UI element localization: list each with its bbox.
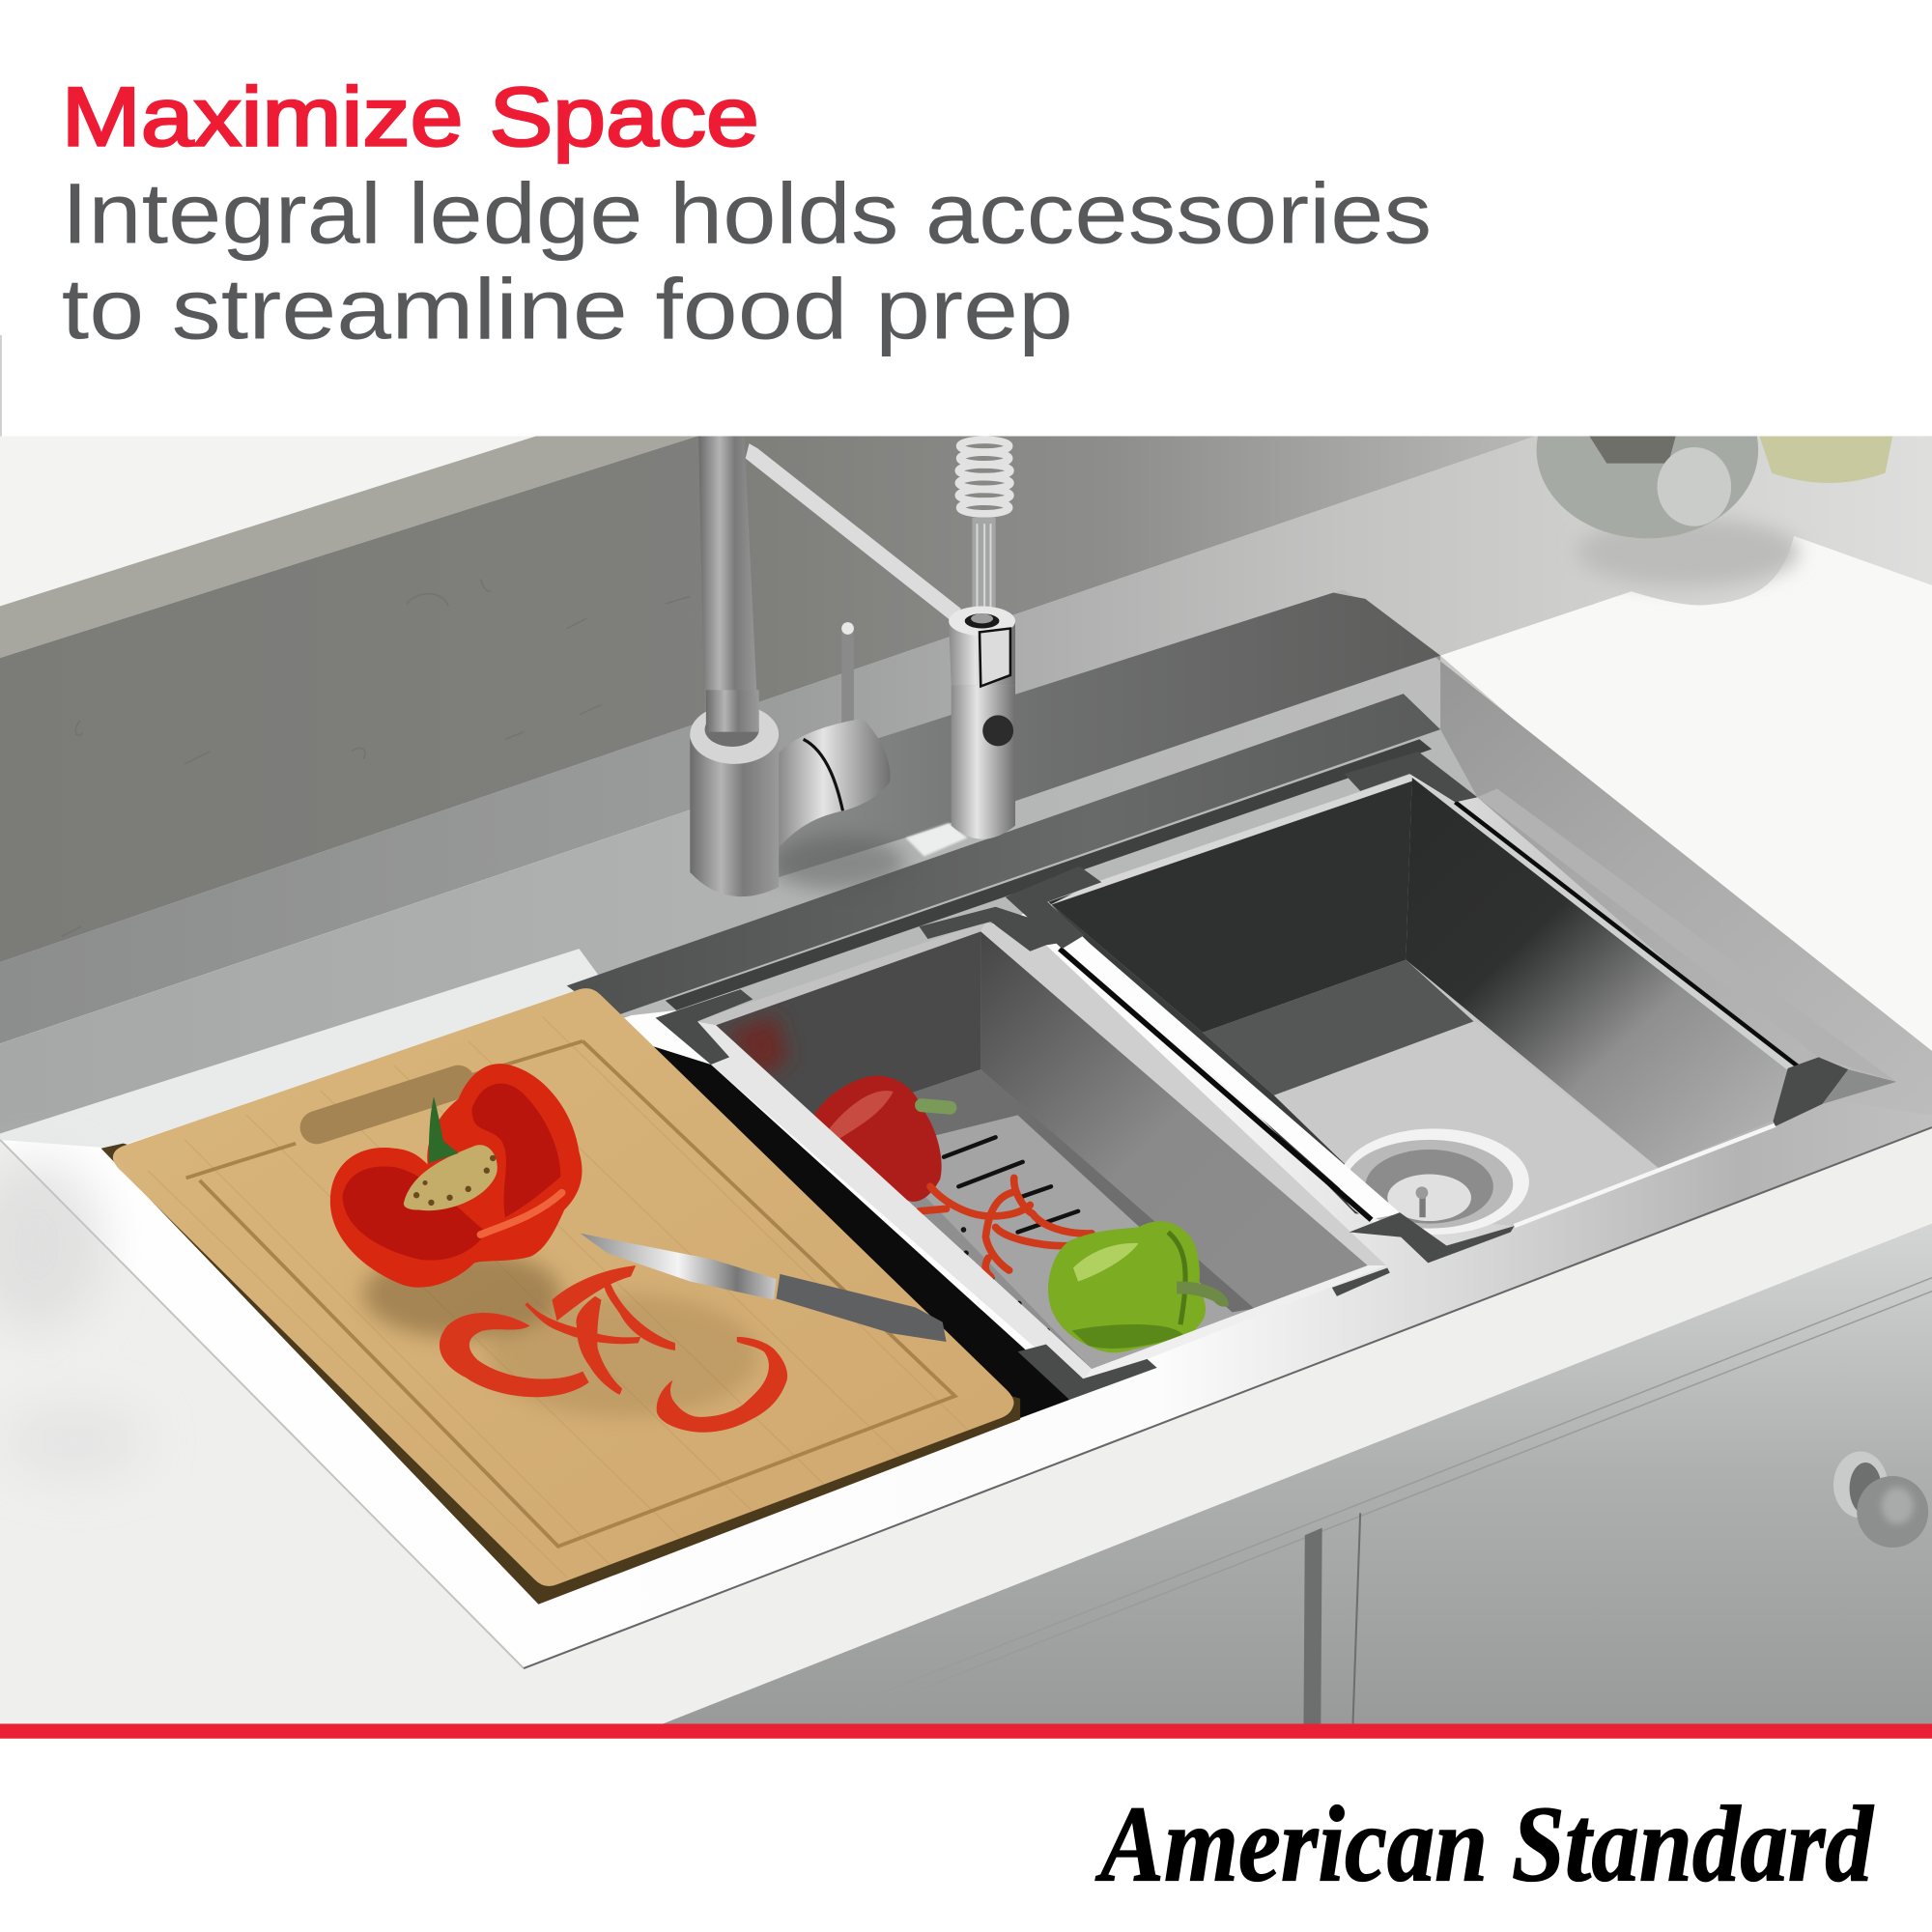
front counter edge bbox=[524, 1130, 1932, 1723]
left bowl bbox=[716, 931, 1368, 1369]
wood grain bbox=[148, 1016, 974, 1608]
right bowl base bbox=[1052, 904, 1543, 1159]
pepper flesh bright rim bbox=[480, 1193, 562, 1235]
spray head bbox=[949, 610, 1015, 685]
right bowl side wall bbox=[1406, 778, 1825, 1168]
juice groove bbox=[186, 1041, 955, 1547]
right bowl back wall bbox=[1048, 778, 1412, 1033]
photo: kitchen sink scene bbox=[0, 361, 1932, 1725]
spout arm bbox=[746, 443, 961, 621]
colander tray bbox=[912, 1069, 1254, 1369]
handle bbox=[777, 1274, 947, 1342]
pepper stem bbox=[429, 1096, 458, 1163]
cabinet door seam bbox=[1303, 1528, 1322, 1723]
pepper slices on board bbox=[440, 1265, 787, 1433]
left bowl base bbox=[716, 931, 1368, 1369]
white reflection strip bbox=[0, 949, 607, 1149]
cabinets bbox=[663, 1224, 1932, 1723]
right rim bbox=[1435, 654, 1932, 1051]
black gap under board bbox=[640, 1042, 1069, 1419]
pepper shadow bbox=[363, 1249, 560, 1338]
slice shadows bbox=[487, 1293, 757, 1417]
faucet shadow bbox=[770, 836, 906, 890]
ledge channel bbox=[567, 694, 1477, 1021]
plate edges bbox=[0, 1127, 1932, 1668]
braided hose bbox=[972, 518, 996, 618]
subheading line 2: to streamline food prep bbox=[62, 261, 1073, 357]
sink top plate bbox=[0, 589, 1932, 1668]
spring bbox=[958, 440, 1010, 514]
back shelf bbox=[0, 437, 697, 658]
bright counter reflection bbox=[1440, 536, 1932, 1084]
divider bar bbox=[1060, 938, 1401, 1220]
rear counter bbox=[0, 437, 1932, 1060]
yellow bottle bbox=[1759, 437, 1892, 483]
dark wall reflection bbox=[779, 593, 1440, 877]
faucet lever bbox=[841, 629, 854, 746]
knife bbox=[581, 1234, 947, 1342]
subheading line 1: Integral ledge holds accessories bbox=[62, 164, 1432, 261]
faucet base bbox=[690, 739, 779, 896]
drain bbox=[1339, 1128, 1529, 1235]
right bowl left wall shadow bbox=[1049, 902, 1359, 1213]
soft reflection patches bbox=[906, 823, 967, 856]
left bowl frame bbox=[695, 922, 1386, 1381]
big red pepper half bbox=[330, 1064, 582, 1288]
cabinet knob bbox=[1833, 1452, 1928, 1548]
left bowl side wall bbox=[980, 931, 1368, 1309]
glass bowl shadow bbox=[1577, 518, 1799, 586]
title block bbox=[62, 71, 1432, 357]
faucet bbox=[690, 437, 1015, 896]
handle cutout bbox=[317, 1082, 458, 1127]
green pepper bbox=[1048, 1221, 1229, 1352]
rear plate strip bbox=[0, 589, 1440, 1146]
right bowl bbox=[1048, 778, 1825, 1235]
concrete wall bbox=[0, 437, 1535, 962]
blade bbox=[581, 1234, 777, 1300]
pepper strips in bowl bbox=[920, 1178, 1092, 1276]
board surface bbox=[113, 988, 1014, 1586]
faucet column bbox=[698, 437, 759, 739]
cutting board bbox=[101, 988, 1020, 1608]
faucet handle body bbox=[779, 719, 891, 848]
right bowl floor bbox=[1274, 1022, 1658, 1173]
ledge corner clips bbox=[656, 752, 1896, 1400]
left bowl back wall bbox=[716, 931, 981, 1117]
counter reflections left bbox=[0, 1158, 148, 1479]
right bowl dark floor band bbox=[1203, 960, 1474, 1095]
pepper seed core bbox=[404, 1145, 497, 1210]
red pepper in bowl bbox=[814, 1075, 950, 1202]
heading: Maximize Space: Maximize Space bbox=[62, 71, 759, 164]
red divider bar bbox=[0, 1723, 1932, 1739]
glass bowl bbox=[1536, 437, 1758, 539]
board shadow recess bbox=[101, 1144, 1020, 1605]
right bowl frame and trough bbox=[1048, 774, 1896, 1226]
